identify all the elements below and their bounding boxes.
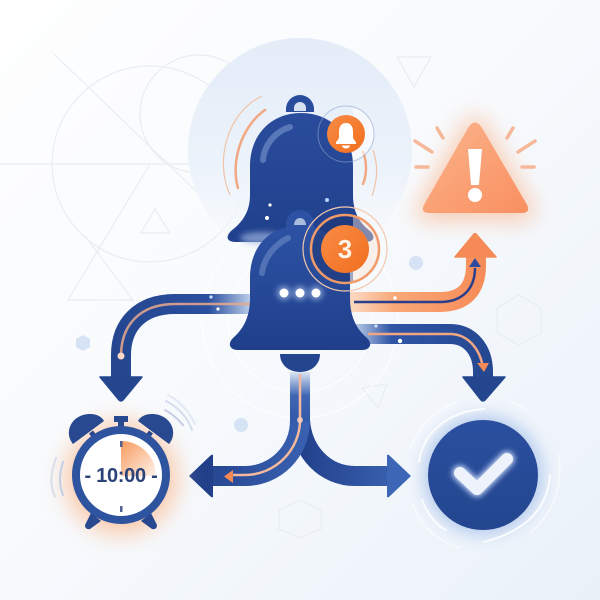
faint rings around lower bell [202, 222, 398, 418]
bell clapper [280, 354, 320, 372]
sound arcs around top bell [223, 96, 377, 196]
three dots [277, 286, 323, 300]
forked arrows under bell [189, 372, 411, 497]
vibration arcs [51, 395, 195, 497]
arrow: right to check [355, 324, 505, 401]
top bell [228, 95, 373, 244]
background geometric line art [0, 53, 541, 538]
orange bell badge [318, 106, 374, 162]
lower bell [230, 210, 370, 350]
halo circle behind top bell [188, 38, 412, 262]
badge with number 3: 3 [338, 234, 352, 264]
white arcs [410, 402, 560, 548]
alarm clock [51, 395, 195, 534]
decorative dots [76, 256, 423, 432]
arrow: right to warning [350, 234, 496, 302]
completed check circle [410, 402, 560, 548]
clock time text: - 10:00 - [85, 465, 157, 487]
warning triangle with rays [415, 122, 535, 213]
badge with number 3 [303, 207, 387, 291]
arrow: left to alarm clock [100, 295, 252, 401]
clock bells [69, 414, 173, 529]
